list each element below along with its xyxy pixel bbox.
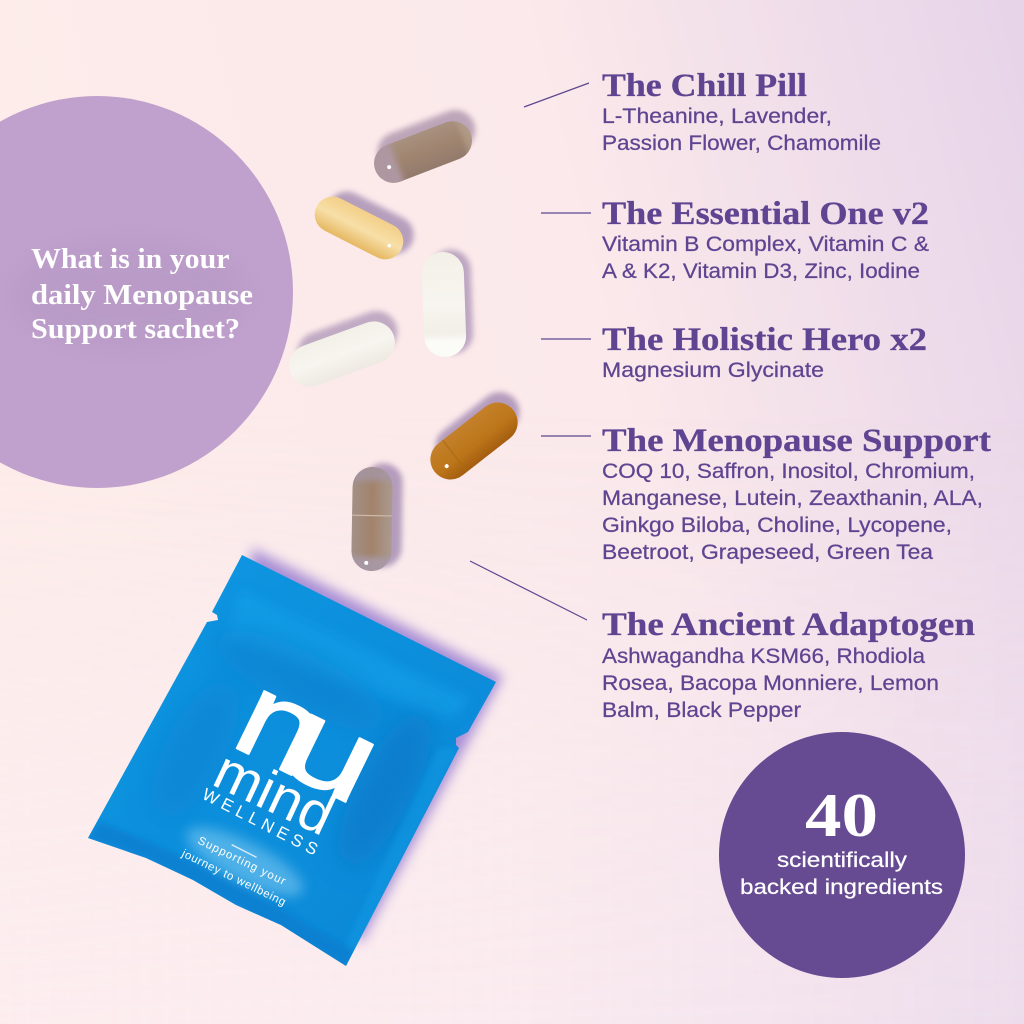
sachet body: [88, 555, 496, 966]
callout: 40 ingredients: backed ingredients: [740, 876, 943, 899]
text block: The Menopause Support: [602, 423, 991, 564]
text block: The Essential One v2: Vitamin B Complex, Vitamin C &: [602, 233, 929, 256]
logo: nu mind wellness: n: [217, 647, 347, 802]
pill: orange: [418, 384, 532, 488]
logo: nu mind wellness: WELLNESS: [199, 785, 321, 859]
pill: white angled: [280, 305, 407, 393]
text block: The Essential One v2: A & K2, Vitamin D3, Zinc, Iodine: [602, 260, 920, 283]
text block: The Menopause Support: Beetroot, Grapeseed, Green Tea: [602, 541, 933, 564]
text block: The Ancient Adaptogen: The Ancient Adaptogen: [602, 607, 975, 643]
heading: question: What is in your: [31, 244, 229, 275]
text block: The Chill Pill: The Chill Pill: [602, 68, 807, 104]
text block: The Essential One v2: The Essential One v2: [602, 196, 929, 232]
leader line: chill pill: [524, 83, 589, 107]
background: [388, 0, 1024, 1024]
leader line: ancient adaptogen: [470, 561, 587, 620]
text block: The Menopause Support: Ginkgo Biloba, Choline, Lycopene,: [602, 514, 952, 537]
leader line: menopause support: [541, 435, 591, 437]
panel: question circle: [0, 96, 293, 488]
logo: nu mind wellness: Supporting your: [196, 835, 287, 888]
text block: The Ancient Adaptogen: Balm, Black Pepper: [602, 699, 801, 722]
heading: question: Support sachet?: [31, 314, 240, 345]
text block: The Ancient Adaptogen: Rosea, Bacopa Monniere, Lemon: [602, 672, 939, 695]
pill: white upright: [416, 249, 474, 364]
heading: question: daily Menopause: [31, 280, 253, 311]
text block: The Menopause Support: The Menopause Support: [602, 423, 991, 459]
text block: The Menopause Support: Manganese, Lutein, Zeaxthanin, ALA,: [602, 487, 983, 510]
logo: nu mind wellness: mind: [205, 738, 344, 847]
icon: blue sachet: [88, 548, 503, 966]
pill: clear brown lower: [347, 461, 403, 578]
callout: 40 ingredients: 40: [805, 782, 878, 850]
text block: The Ancient Adaptogen: Ashwagandha KSM66, Rhodiola: [602, 645, 925, 668]
leader line: essential one: [541, 212, 591, 214]
text block: The Holistic Hero x2: Magnesium Glycinate: [602, 359, 824, 382]
text block: The Holistic Hero x2: [602, 322, 927, 382]
logo: nu mind wellness: u: [263, 670, 402, 830]
text block: The Menopause Support: COQ 10, Saffron, Inositol, Chromium,: [602, 460, 975, 483]
logo: nu mind wellness: [179, 647, 402, 909]
logo: nu mind wellness: journey to wellbeing: [179, 847, 287, 909]
text block: The Holistic Hero x2: The Holistic Hero x2: [602, 322, 927, 358]
text block: The Chill Pill: [602, 68, 881, 155]
text block: The Chill Pill: L-Theanine, Lavender,: [602, 105, 832, 128]
sachet shadow: [240, 548, 503, 945]
leader line: holistic hero: [541, 338, 591, 340]
text block: The Essential One v2: [602, 196, 929, 283]
text block: The Ancient Adaptogen: [602, 607, 975, 722]
callout: 40 ingredients: [719, 732, 965, 978]
callout: 40 ingredients: scientifically: [777, 849, 908, 872]
text block: The Chill Pill: Passion Flower, Chamomile: [602, 132, 881, 155]
pill: yellow: [309, 181, 420, 269]
pill: clear brown top: [374, 107, 478, 183]
sachet shading: [88, 590, 470, 966]
